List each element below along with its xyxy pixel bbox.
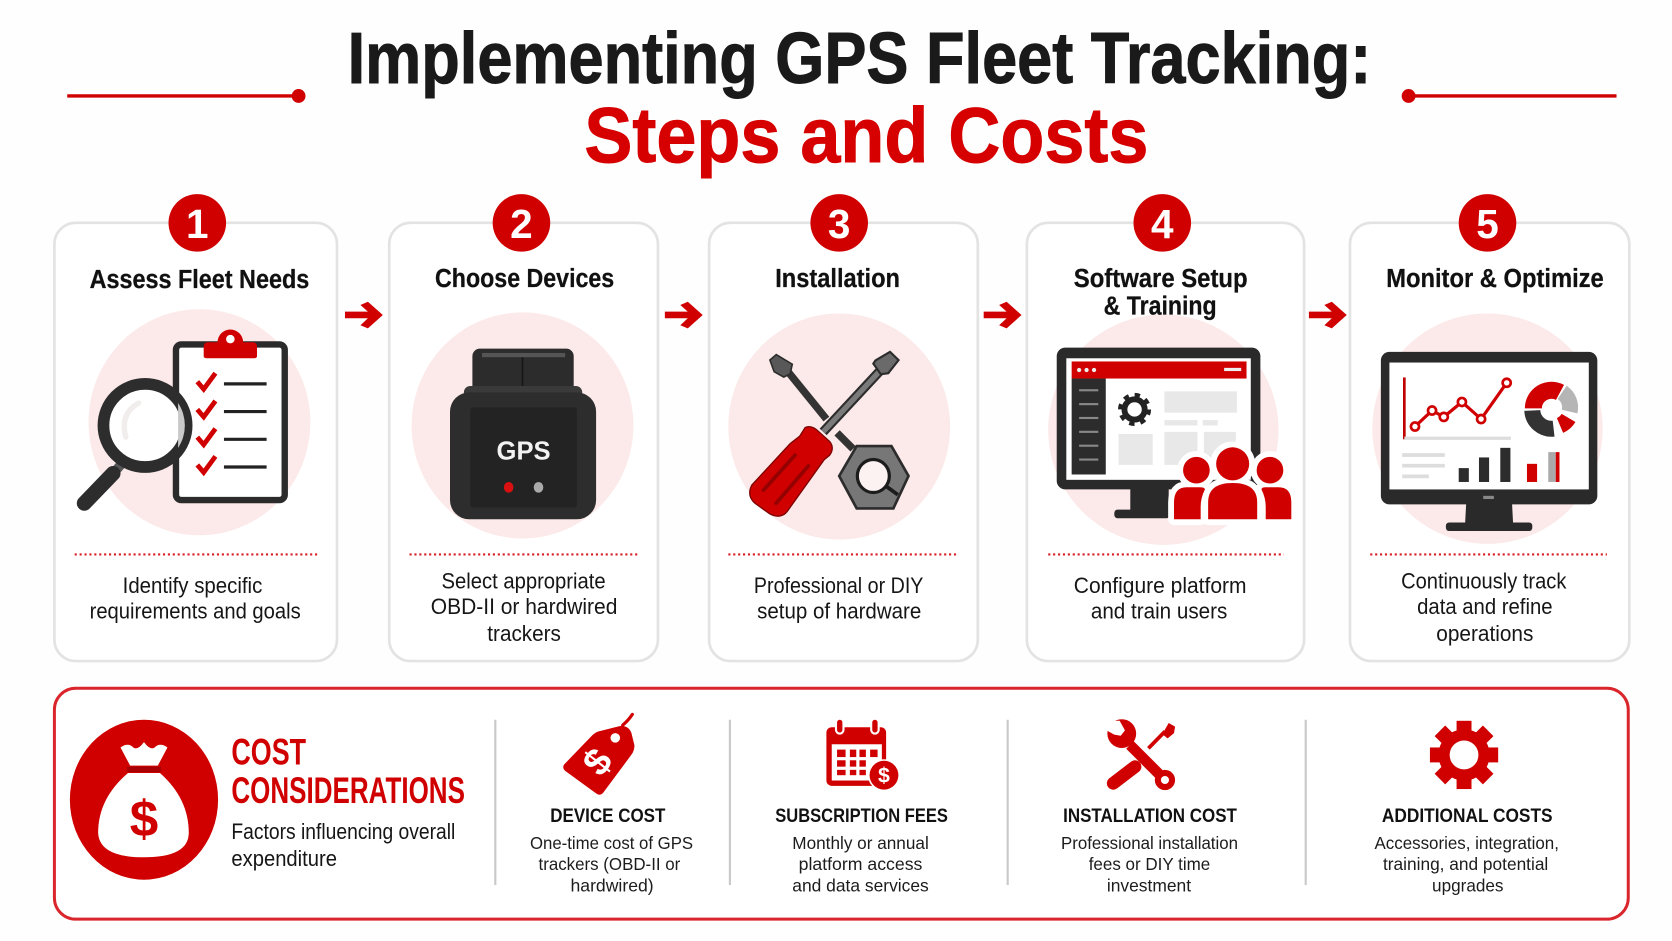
step 5 description: data and refine [1417, 594, 1553, 619]
cost item: additional costs [1374, 721, 1559, 895]
icon: gear in monitor [1120, 395, 1149, 424]
title rule left [67, 89, 306, 103]
icon: software monitor [1057, 348, 1260, 518]
title: Implementing GPS Fleet Tracking: [348, 18, 1371, 99]
step 4 badge: 4 [1151, 201, 1174, 247]
icon: price tag [563, 714, 634, 795]
panel: step 3 installation [709, 194, 978, 661]
step 4 heading [1074, 265, 1248, 321]
panel: step 4 software setup and training [1027, 194, 1304, 661]
step 5 description [1401, 569, 1566, 646]
step 2 badge [493, 194, 550, 252]
cost item: subscription fees [775, 718, 948, 895]
cost item: device cost: DEVICE COST [550, 805, 665, 827]
icon: magnifying glass [84, 384, 187, 503]
panel: step 2 choose devices [389, 194, 658, 661]
step 2 description: trackers [487, 621, 561, 646]
cost item: installation cost: Professional installation [1061, 833, 1238, 853]
icon: calendar with dollar: $ [878, 764, 890, 788]
step 2 description: Select appropriate [441, 569, 606, 594]
cost item: subscription fees: and data services [792, 875, 929, 895]
icon: analytics monitor [1381, 352, 1597, 531]
step 2 description [431, 569, 617, 646]
panel: cost considerations [54, 688, 1628, 919]
icon: crossed screwdrivers [750, 352, 899, 516]
cost item: additional costs: ADDITIONAL COSTS [1382, 805, 1553, 827]
cost item: installation cost: investment [1107, 875, 1191, 895]
cost item: additional costs: Accessories, integration, [1374, 833, 1559, 853]
step 5 heading: Monitor & Optimize [1386, 265, 1604, 293]
step 5 description: operations [1436, 621, 1533, 646]
icon: clipboard with checklist [176, 329, 285, 500]
step 3 description: setup of hardware [757, 598, 921, 623]
step 1 badge [169, 194, 226, 252]
bar chart [1402, 448, 1559, 482]
step 1 description: Identify specific [123, 573, 262, 598]
step 2 description: OBD-II or hardwired [431, 594, 617, 619]
cost item: device cost: trackers (OBD-II or [539, 854, 680, 874]
icon: wrench and screwdriver [1105, 719, 1175, 790]
step 1 description: requirements and goals [90, 598, 301, 623]
cost subheading: expenditure [231, 846, 337, 871]
cost item: device cost: One-time cost of GPS [530, 833, 693, 853]
icon: price tag: $ [574, 741, 621, 784]
step 5 description: Continuously track [1401, 569, 1566, 594]
panel: step 5 monitor and optimize [1350, 194, 1629, 661]
step 3 description: Professional or DIY [754, 573, 924, 598]
step 1 badge: 1 [186, 201, 209, 247]
donut chart [1532, 390, 1570, 429]
cost subheading: Factors influencing overall [231, 819, 455, 844]
icon: gear [1430, 721, 1498, 789]
title [348, 18, 1371, 179]
icon: group of users [1174, 447, 1291, 519]
step 2 badge: 2 [510, 201, 533, 247]
step 3 description [754, 573, 924, 623]
step 4 heading: & Training [1104, 293, 1217, 321]
step 4 badge [1133, 194, 1191, 252]
cost item: installation cost [1061, 719, 1238, 895]
panel: step 1 assess fleet needs [54, 194, 337, 661]
step 4 description: Configure platform [1074, 573, 1247, 598]
cost heading [231, 731, 465, 811]
cost item: subscription fees: Monthly or annual [792, 833, 929, 853]
cost item: additional costs: upgrades [1432, 875, 1504, 895]
arrow 2 to 3 [665, 302, 703, 328]
title: Steps and Costs [584, 93, 1148, 179]
icon: hex nut [839, 446, 909, 508]
step 5 badge: 5 [1476, 201, 1499, 247]
cost item: subscription fees: SUBSCRIPTION FEES [775, 805, 948, 827]
icon: calendar with dollar [826, 718, 900, 791]
icon: GPS OBD device: GPS [497, 438, 551, 466]
icon: money bag [70, 720, 218, 880]
step 2 heading: Choose Devices [435, 265, 614, 293]
step 5 badge [1459, 194, 1516, 252]
step 1 heading: Assess Fleet Needs [90, 266, 309, 294]
line chart [1404, 377, 1511, 439]
cost item: installation cost: INSTALLATION COST [1063, 805, 1237, 827]
arrow 3 to 4 [984, 302, 1022, 328]
step 3 badge: 3 [828, 201, 850, 247]
step 1 description [90, 573, 301, 623]
step 4 description: and train users [1091, 598, 1227, 623]
step 3 heading: Installation [775, 265, 900, 293]
arrow 4 to 5 [1309, 302, 1347, 328]
cost item: subscription fees: platform access [799, 854, 923, 874]
cost heading: CONSIDERATIONS [231, 769, 465, 811]
title rule right [1402, 89, 1617, 103]
step 3 badge [810, 194, 868, 252]
cost item: installation cost: fees or DIY time [1089, 854, 1210, 874]
step 4 heading: Software Setup [1074, 265, 1248, 293]
cost item: additional costs: training, and potential [1383, 854, 1548, 874]
cost heading: COST [231, 731, 306, 773]
cost subheading [231, 819, 455, 871]
cost item: device cost: hardwired) [570, 875, 654, 895]
step 4 description [1074, 573, 1247, 623]
icon: GPS OBD device [450, 349, 596, 519]
arrow 1 to 2 [345, 302, 383, 328]
icon: money bag: $ [130, 790, 158, 847]
cost item: device cost [530, 714, 693, 895]
